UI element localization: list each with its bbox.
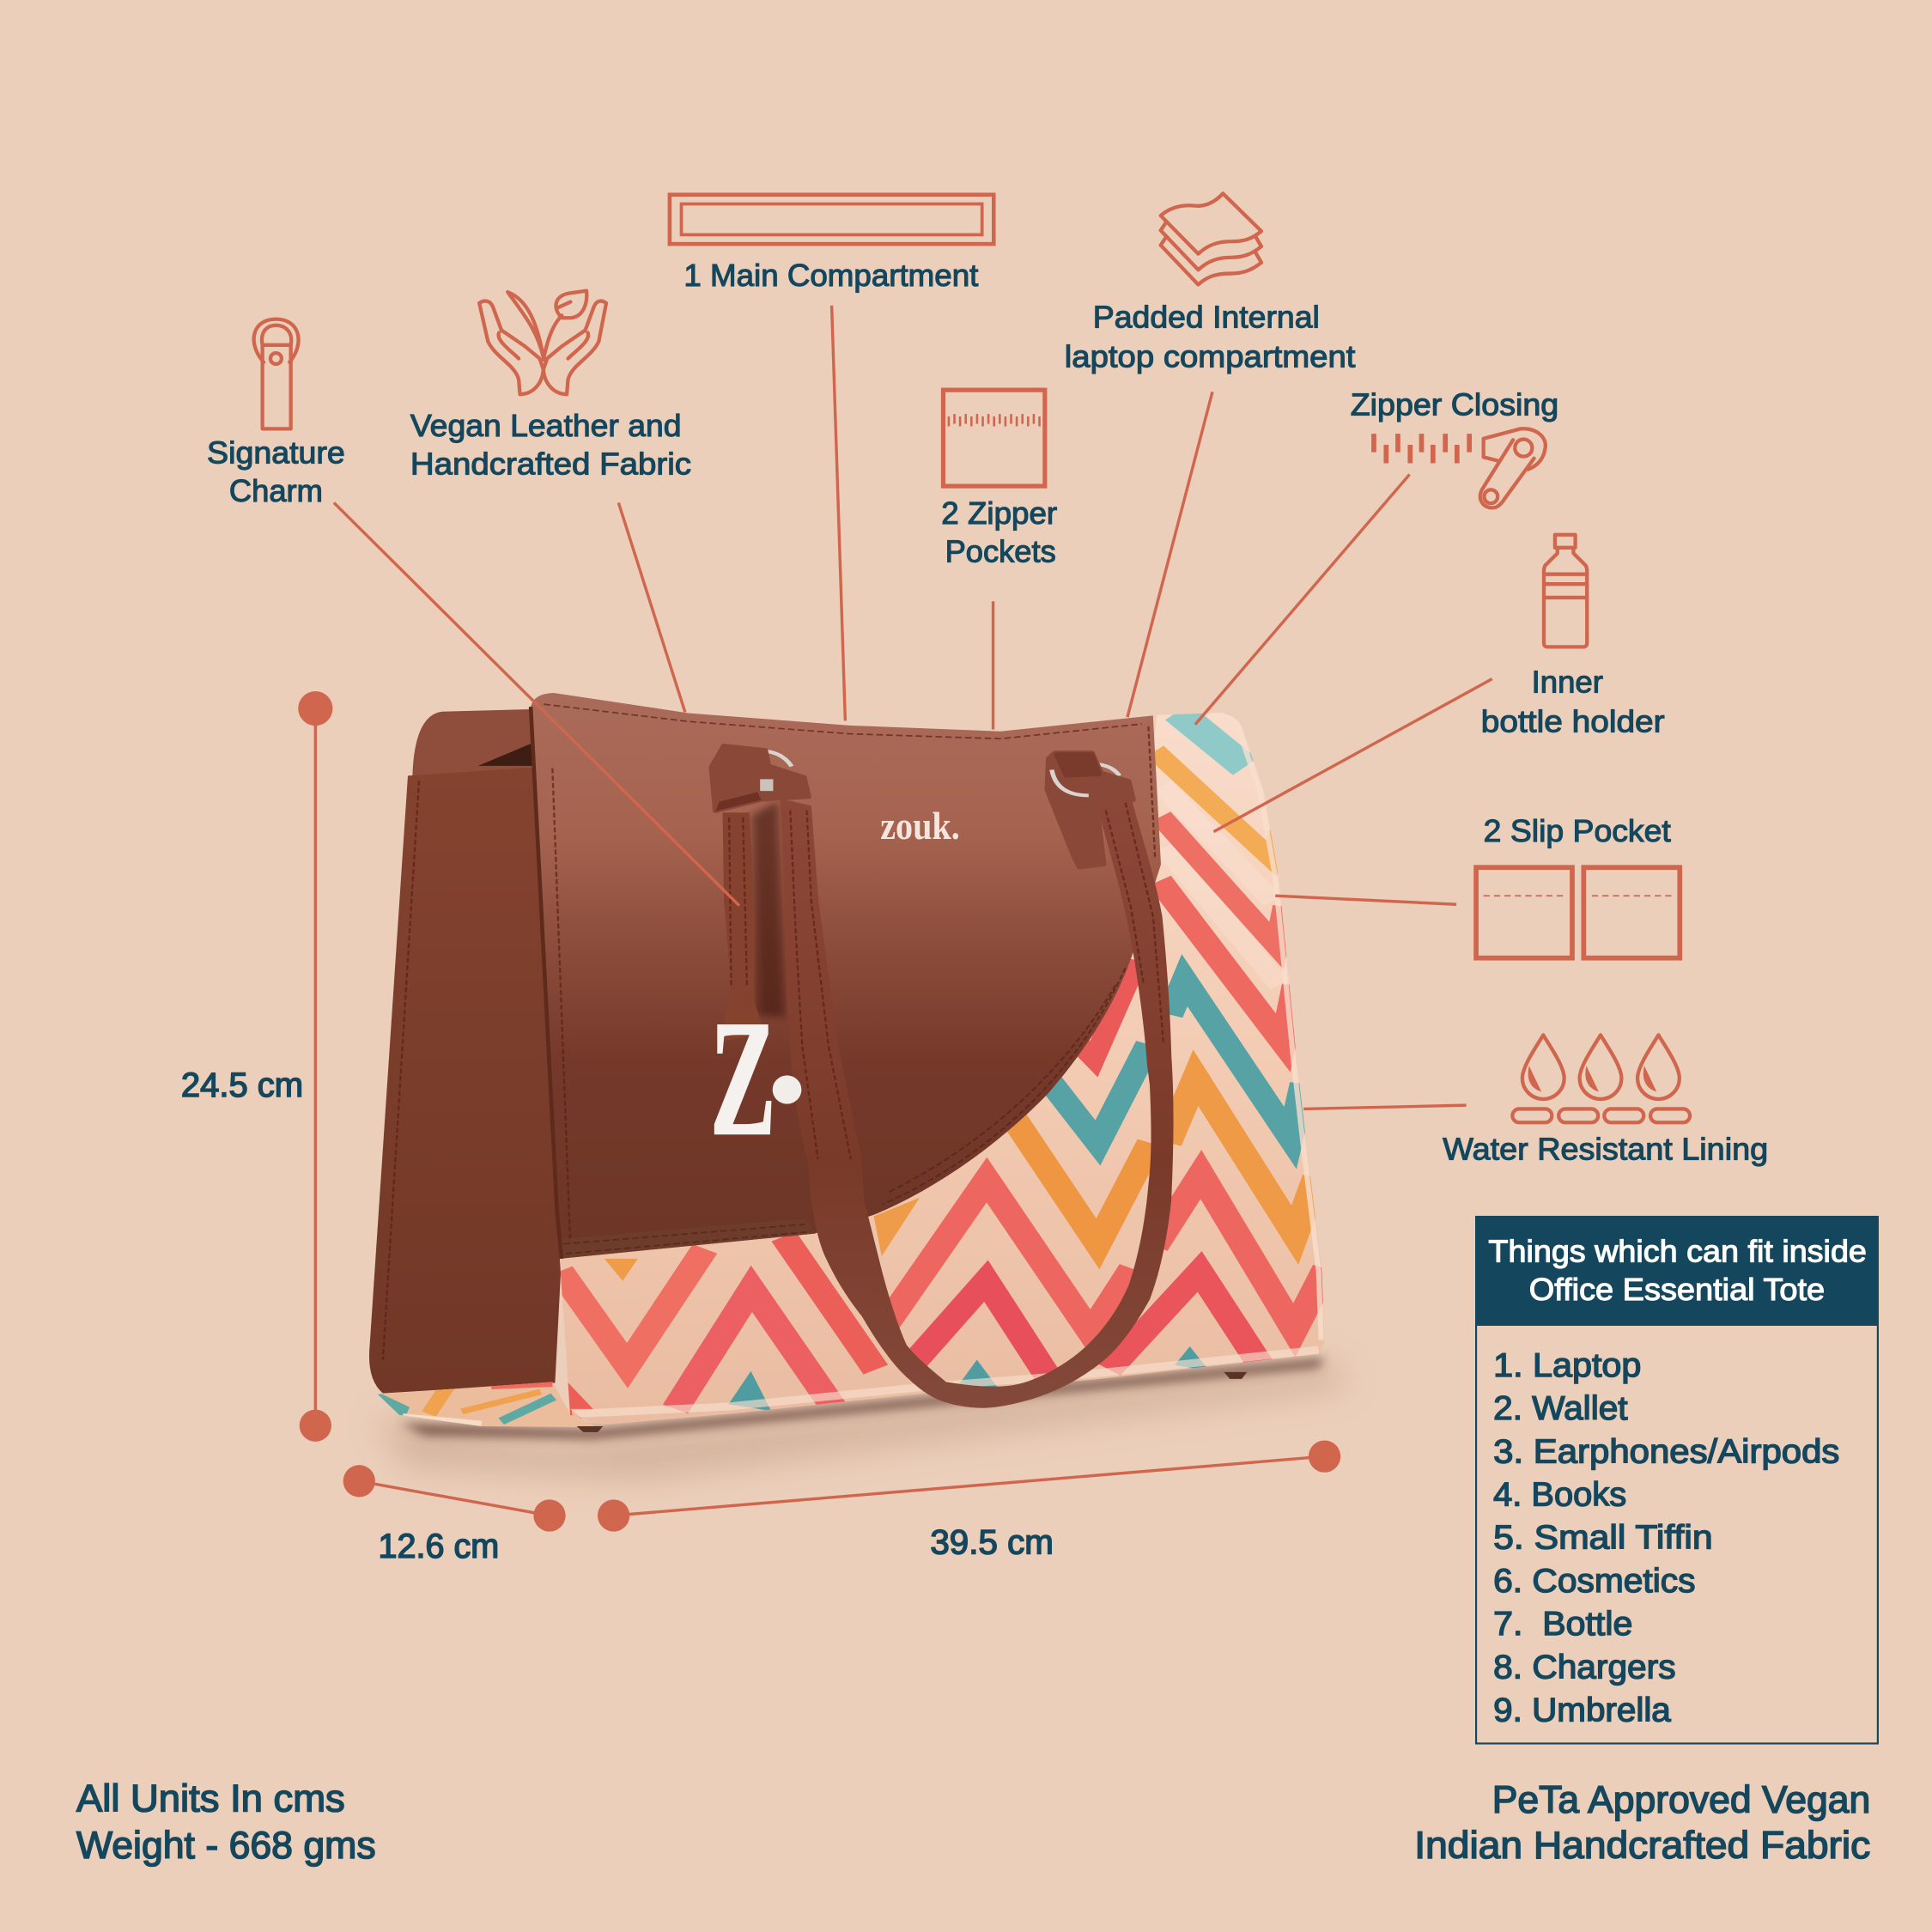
height dimension <box>181 691 332 1442</box>
teal chevrons <box>1170 981 1303 1138</box>
charm stitching <box>729 817 747 985</box>
bag feet <box>577 1372 1247 1432</box>
width dimension: 39.5 cm <box>930 1522 1054 1561</box>
icon: bottle <box>1544 535 1587 647</box>
list of items: 9. Umbrella <box>1493 1692 1671 1729</box>
panel: things which can fit inside <box>1476 1216 1878 1743</box>
list of items: 5. Small Tiffin <box>1493 1520 1713 1557</box>
patterned fabric panel <box>554 709 1336 1434</box>
icon: padded layers <box>1161 193 1261 284</box>
zipper opening <box>478 744 534 766</box>
charm letter Z <box>710 987 801 1170</box>
list of items: 2. Wallet <box>1493 1390 1628 1427</box>
strap stitching <box>790 803 1163 1159</box>
label: zipper pockets: Pockets <box>945 534 1056 568</box>
label: water resistant lining: Water Resistant Lining <box>1443 1132 1768 1166</box>
leather seam stitches <box>544 704 1155 1254</box>
charm letter Z: Z <box>710 987 776 1170</box>
depth dimension <box>343 1465 566 1565</box>
fabric binding <box>572 1350 1319 1414</box>
leather panel edge <box>531 707 562 1259</box>
label: main compartment: 1 Main Compartment <box>683 258 978 293</box>
label: slip pocket: 2 Slip Pocket <box>1484 814 1671 848</box>
label: zipper closing: Zipper Closing <box>1351 388 1558 422</box>
label: vegan leather: Handcrafted Fabric <box>410 447 691 481</box>
depth dimension: 12.6 cm <box>379 1527 499 1565</box>
note: units and weight: All Units In cms <box>76 1777 345 1820</box>
label: inner bottle holder: Inner <box>1532 665 1603 699</box>
shoulder strap <box>780 799 1174 1408</box>
icon: zipper closing <box>1374 428 1546 507</box>
callout lines <box>334 306 1492 1109</box>
red chevrons <box>1155 1175 1326 1330</box>
note: units and weight <box>76 1777 376 1867</box>
top chevrons <box>1177 712 1245 767</box>
pale bands <box>1161 854 1289 989</box>
leather bottom band <box>560 1218 815 1259</box>
side gusset stitching <box>383 781 419 1360</box>
side gusset fabric <box>378 1382 594 1427</box>
label: padded laptop compartment: laptop compartment <box>1065 340 1355 374</box>
note: vegan and handcrafted: PeTa Approved Vegan <box>1492 1779 1870 1821</box>
left strap tab <box>712 745 809 811</box>
icon: hands and plant <box>479 291 606 394</box>
label: zipper pockets <box>941 496 1057 568</box>
charm strap <box>720 812 765 1042</box>
bag shadow <box>376 1358 1349 1479</box>
list of items: 1. Laptop <box>1493 1347 1641 1384</box>
label: signature charm <box>207 436 345 508</box>
label: padded laptop compartment <box>1065 301 1355 374</box>
note: vegan and handcrafted <box>1414 1779 1870 1867</box>
panel header <box>1476 1216 1878 1326</box>
label: vegan leather <box>410 409 691 481</box>
list of items: 8. Chargers <box>1493 1649 1676 1686</box>
orange chevrons <box>1168 1078 1316 1235</box>
width dimension <box>598 1440 1340 1561</box>
handbag photo <box>369 693 1336 1434</box>
label: inner bottle holder: bottle holder <box>1481 704 1665 738</box>
note: vegan and handcrafted: Indian Handcrafted Fabric <box>1414 1825 1870 1867</box>
side gusset <box>369 768 562 1394</box>
shadow behind charm <box>752 800 785 1018</box>
brand logo: zouk. <box>880 804 960 848</box>
icon: signature charm <box>254 319 299 428</box>
list of items: 3. Earphones/Airpods <box>1493 1433 1839 1470</box>
label: padded laptop compartment: Padded Internal <box>1093 301 1320 335</box>
icon: main compartment <box>670 195 993 244</box>
label: signature charm: Charm <box>229 474 323 508</box>
list of items: 4. Books <box>1493 1477 1626 1514</box>
note: units and weight: Weight - 668 gms <box>76 1825 376 1867</box>
icon: water drops <box>1512 1035 1690 1122</box>
teal tips <box>728 1346 1210 1411</box>
label: inner bottle holder <box>1481 665 1665 738</box>
front leather panel <box>531 693 1161 1259</box>
list of items: 6. Cosmetics <box>1493 1563 1695 1600</box>
label: signature charm: Signature <box>207 436 345 471</box>
label: vegan leather: Vegan Leather and <box>410 409 682 443</box>
bag back panel <box>412 709 544 775</box>
list of items <box>1493 1347 1839 1729</box>
panel header: Things which can fit inside <box>1488 1234 1867 1268</box>
right strap tab <box>1048 752 1133 867</box>
panel header: Office Essential Tote <box>1529 1273 1825 1307</box>
list of items: 7. Bottle <box>1493 1606 1632 1643</box>
icon: slip pockets <box>1476 867 1680 958</box>
height dimension: 24.5 cm <box>181 1066 303 1104</box>
icon: zipper pockets <box>943 390 1045 486</box>
label: zipper pockets: 2 Zipper <box>941 496 1057 531</box>
